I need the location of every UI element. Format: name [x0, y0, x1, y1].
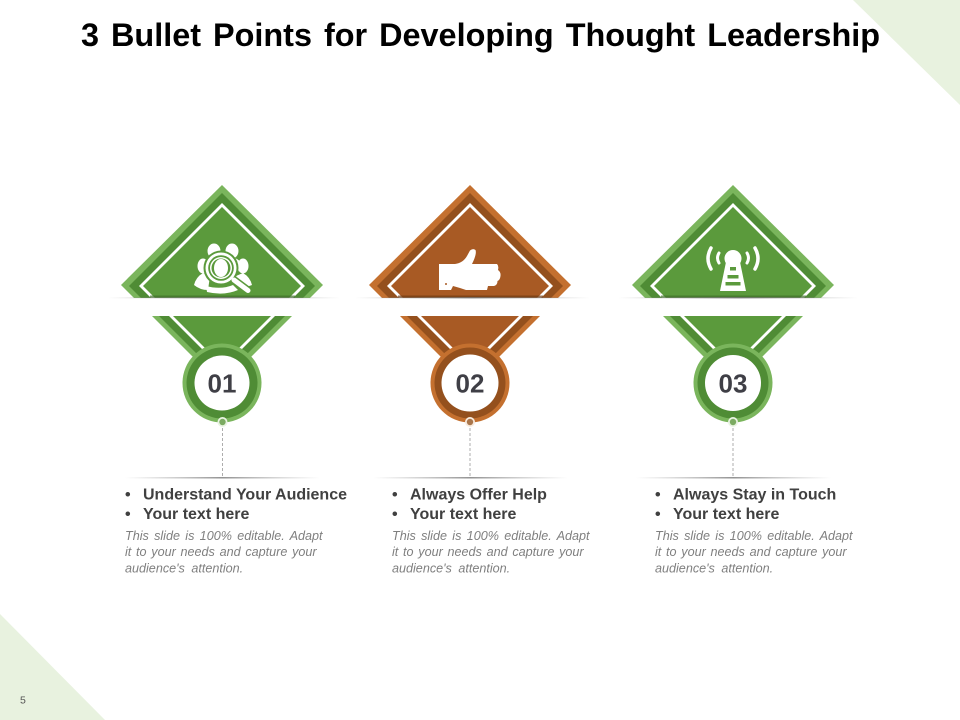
text block 01: • [125, 486, 131, 504]
number circle 02 [430, 344, 510, 422]
text block 01: This slide is 100% editable. Adapt [125, 529, 323, 543]
text block 02: Always Offer Help [410, 486, 547, 504]
icon: hand thumbs up [439, 249, 501, 290]
text block 03: it to your needs and capture your [655, 545, 847, 559]
icon: broadcast tower [708, 248, 758, 291]
icon: people with magnifier [194, 244, 252, 294]
text block 03: This slide is 100% editable. Adapt [655, 529, 853, 543]
decorative corner: top right [853, 0, 960, 105]
text block 03: Always Stay in Touch [673, 486, 836, 504]
connector 01 [125, 417, 320, 478]
text block 01: it to your needs and capture your [125, 545, 317, 559]
panel: item 01 [108, 185, 347, 576]
text block 02 [392, 486, 590, 576]
text block 01 [125, 486, 347, 576]
text block 02: audience's attention. [392, 562, 510, 576]
number circle 01 [182, 344, 262, 422]
text block 01: audience's attention. [125, 562, 243, 576]
title: 3 Bullet Points for Developing Thought Leadership [81, 17, 880, 53]
connector 02 [373, 417, 568, 478]
text block 01: Understand Your Audience [143, 486, 347, 504]
diamond badge 01 [108, 185, 340, 386]
text block 01: • [125, 506, 131, 523]
text block 03: • [655, 506, 661, 523]
panel: item 02 [355, 185, 590, 576]
connector 03 [636, 417, 831, 478]
panel: item 03 [618, 185, 858, 576]
decorative corner: bottom left [0, 614, 105, 720]
text block 03: • [655, 486, 661, 504]
number circle 01: 01 [208, 368, 236, 398]
text block 02: This slide is 100% editable. Adapt [392, 529, 590, 543]
number circle 03: 03 [719, 368, 747, 398]
text block 01: Your text here [143, 506, 250, 523]
text block 02: • [392, 486, 398, 504]
diamond badge 02 [355, 185, 590, 386]
diamond badge 03 [618, 185, 858, 386]
page number: 5 [20, 694, 26, 706]
text block 03: audience's attention. [655, 562, 773, 576]
text block 03: Your text here [673, 506, 780, 523]
number circle 02: 02 [456, 368, 484, 398]
text block 02: it to your needs and capture your [392, 545, 584, 559]
number circle 03 [694, 344, 772, 422]
text block 02: • [392, 506, 398, 523]
text block 03 [655, 486, 853, 576]
text block 02: Your text here [410, 506, 516, 523]
